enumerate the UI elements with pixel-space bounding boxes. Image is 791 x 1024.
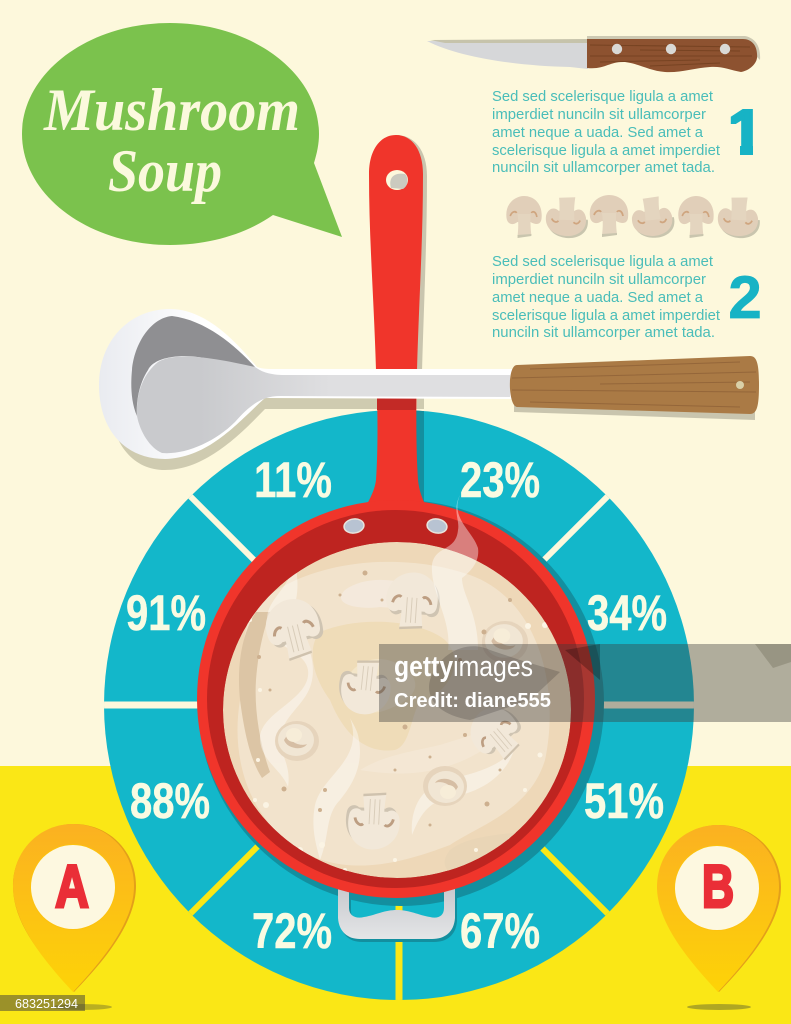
icon: map pin B: [657, 825, 781, 1010]
letter B: B: [702, 854, 734, 921]
text block: step 2: nunciln sit ullamcorper amet tada.: [492, 325, 715, 341]
watermark credit text: Credit: diane555: [394, 690, 551, 712]
text block: step 1: scelerisque ligula a amet imperdiet: [492, 143, 720, 159]
label: 72%: 72%: [252, 903, 332, 959]
text block: step 1: amet neque a uada. Sed amet a: [492, 125, 704, 141]
chart: circular percentage ring: [100, 409, 698, 1004]
background: yellow table: [0, 766, 791, 1024]
ladle shadow on handle: [377, 396, 416, 410]
soup flecks: [257, 570, 512, 826]
label: 88%: 88%: [130, 773, 210, 829]
number 1: 1: [728, 98, 763, 168]
image id tag: 683251294: [15, 997, 78, 1011]
icon: ladle shadow: [108, 320, 424, 470]
ladle bowl and stem: [99, 309, 512, 459]
text block: step 2: [492, 254, 720, 341]
mushrooms in soup: [266, 600, 324, 661]
label: 11%: 11%: [254, 452, 332, 508]
icon: pan with soup: [197, 495, 595, 898]
icon: helper handle: [338, 885, 457, 942]
label: 67%: 67%: [460, 903, 540, 959]
speech bubble with title: [22, 23, 342, 245]
icon: map pin A: [13, 824, 136, 1010]
pan rim: [197, 500, 595, 898]
text block: step 1: [492, 89, 720, 176]
label: 23%: 23%: [460, 452, 540, 508]
watermark logo text: gettyimages: [394, 651, 533, 683]
ladle wooden handle: [510, 356, 759, 414]
rivet: right: [426, 517, 448, 535]
icon: pan handle: [367, 135, 427, 504]
background: cream wall: [0, 0, 791, 766]
steam: [260, 560, 520, 860]
label: 91%: 91%: [126, 585, 206, 641]
label: 34%: 34%: [587, 585, 667, 641]
rivet: left: [343, 518, 365, 534]
text block: step 1: nunciln sit ullamcorper amet tada.: [492, 160, 715, 176]
text block: step 2: amet neque a uada. Sed amet a: [492, 290, 704, 306]
image id tag: [0, 995, 85, 1011]
title: Mushroom: Mushroom: [43, 77, 300, 143]
icon: ladle: [99, 309, 759, 459]
steam: rising over the rim: [432, 495, 478, 650]
soup surface: [223, 542, 571, 879]
text block: step 1: imperdiet nunciln sit ullamcorper: [492, 107, 706, 123]
text block: step 1: Sed sed scelerisque ligula a amet: [492, 89, 713, 105]
text block: step 2: Sed sed scelerisque ligula a amet: [492, 254, 713, 270]
icon: mushroom slices row: [506, 195, 761, 240]
text block: step 2: imperdiet nunciln sit ullamcorper: [492, 272, 706, 288]
icon: knife: [427, 36, 760, 72]
label: 51%: 51%: [584, 773, 664, 829]
watermark band: [379, 644, 791, 722]
title: Soup: Soup: [108, 138, 222, 204]
number 2: 2: [728, 264, 762, 331]
letter A: A: [55, 853, 89, 920]
text block: step 2: scelerisque ligula a amet imperdiet: [492, 308, 720, 324]
